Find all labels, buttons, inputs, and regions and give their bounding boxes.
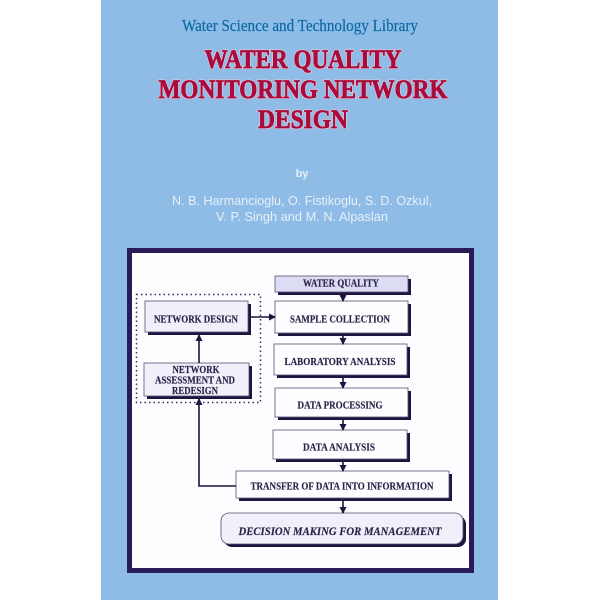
box: water quality (275, 276, 411, 295)
dotted network group (136, 294, 260, 402)
title line 1: WATER QUALITY (204, 45, 402, 74)
authors: N. B. Harmancioglu, O. Fistikoglu, S. D. Ozkul, (172, 194, 432, 208)
title line 3 fill: DESIGN (258, 105, 348, 134)
box: network design (145, 301, 251, 335)
box: sample collection: SAMPLE COLLECTION (290, 314, 391, 326)
box: network assessment and redesign: REDESIGN (172, 386, 219, 397)
title line 2: MONITORING NETWORK (158, 75, 448, 104)
box: transfer of data into information (236, 471, 452, 501)
box: decision making for management (221, 513, 466, 547)
box: decision making for management: DECISION MAKING FOR MANAGEMENT (238, 526, 442, 538)
title line 2 fill: MONITORING NETWORK (158, 75, 448, 104)
authors: V. P. Singh and M. N. Alpaslan (216, 210, 388, 224)
authors (172, 168, 432, 224)
arrows (199, 295, 343, 513)
box: data analysis (273, 430, 410, 462)
box: network design: NETWORK DESIGN (154, 314, 239, 326)
box: data processing: DATA PROCESSING (298, 400, 383, 412)
box: data analysis: DATA ANALYSIS (303, 442, 375, 454)
series name: Water Science and Technology Library (182, 16, 419, 35)
box: network assessment and redesign: NETWORK (172, 365, 220, 376)
title line 3: DESIGN (258, 105, 348, 134)
box: network assessment and redesign (144, 363, 252, 399)
box: water quality: WATER QUALITY (303, 278, 380, 290)
box: sample collection (275, 301, 411, 336)
box: laboratory analysis: LABORATORY ANALYSIS (284, 357, 396, 368)
box: network assessment and redesign: ASSESSMENT AND (155, 376, 235, 386)
box: transfer of data into information: TRANSFER OF DATA INTO INFORMATION (250, 482, 434, 492)
title line 1 fill: WATER QUALITY (204, 45, 402, 74)
box: data processing (275, 388, 411, 420)
title (158, 45, 448, 134)
flowchart panel (130, 250, 472, 570)
authors: by (296, 168, 309, 180)
box: laboratory analysis (274, 344, 410, 378)
cover background (101, 0, 498, 600)
